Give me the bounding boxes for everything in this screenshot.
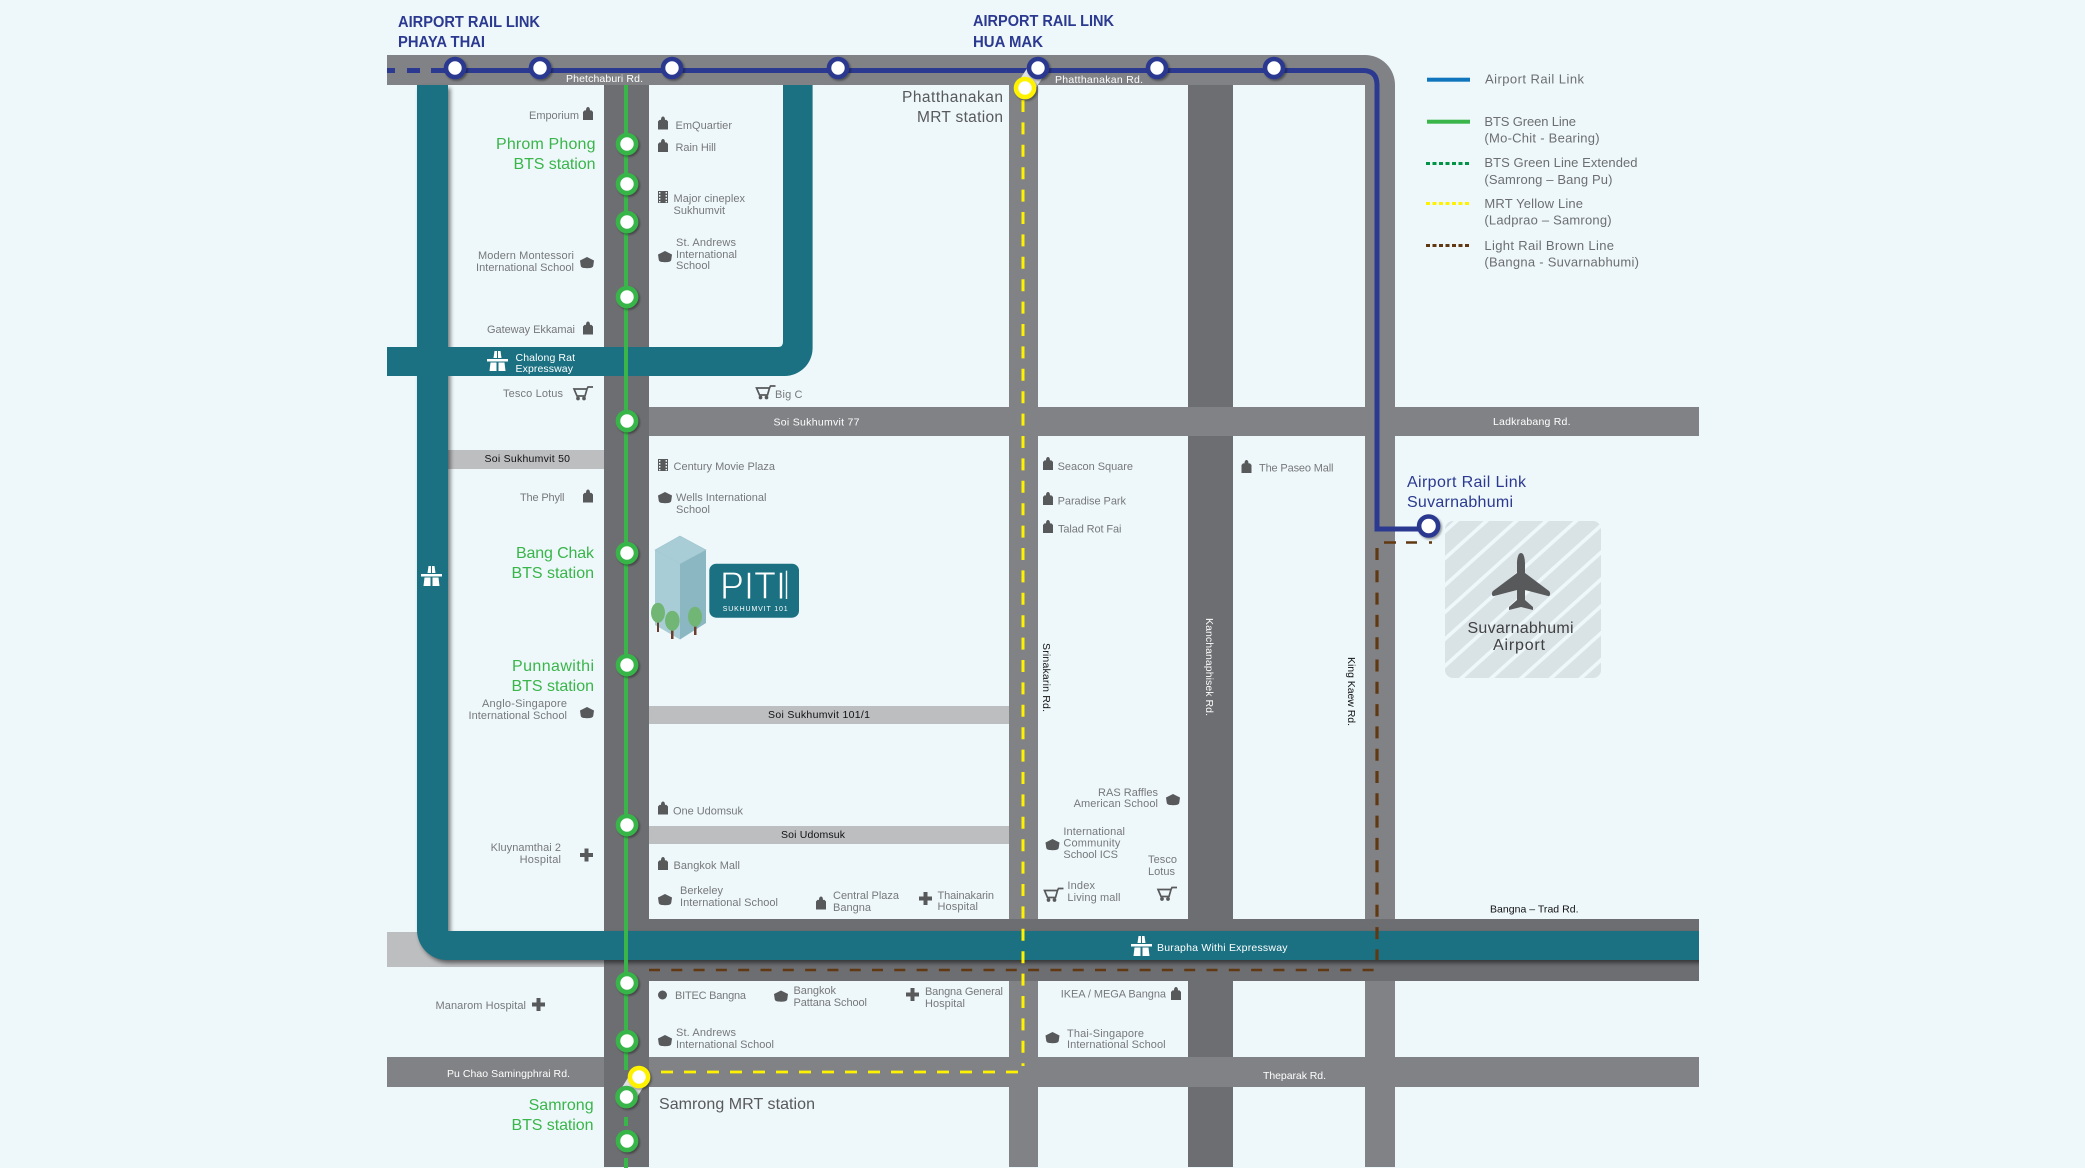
poi: Anglo-Singapore	[468, 698, 594, 722]
legend: BTS Green Line Extended: BTS Green Line Extended	[1484, 155, 1638, 170]
road label: Soi Sukhumvit 50: Soi Sukhumvit 50	[484, 453, 570, 465]
poi: Big C	[756, 386, 803, 401]
heading: Airport Rail Link Phaya Thai: PHAYA THAI	[398, 34, 485, 51]
station: airport link 4	[829, 59, 847, 77]
road: Soi Sukhumvit 101/1	[649, 706, 1009, 724]
poi: BITEC Bangna: BITEC Bangna	[675, 990, 747, 1002]
poi: Emporium	[529, 107, 593, 122]
label: Samrong BTS: BTS station	[512, 1117, 594, 1134]
legend: Airport Rail Link	[1427, 72, 1584, 86]
light rail brown line	[649, 542, 1432, 970]
label: Phatthanakan MRT station: MRT station	[917, 109, 1003, 126]
poi: Major cineplex: Major cineplex	[674, 193, 746, 205]
road label: Soi Sukhumvit 77: Soi Sukhumvit 77	[774, 416, 860, 428]
road: Bangna-Trad east	[604, 919, 1699, 981]
poi: Major cineplex	[658, 191, 746, 217]
road: Phetchaburi, Phatthanakan and King Kaew	[387, 55, 1395, 1167]
legend: BTS Green Line	[1427, 114, 1600, 146]
poi: Berkeley International School	[658, 885, 778, 909]
PITI Sukhumvit 101 logo badge: PITI	[720, 565, 786, 608]
poi: EmQuartier: EmQuartier	[676, 120, 732, 132]
poi: Bangkok Pattana School	[774, 985, 867, 1009]
expressway shadow	[420, 88, 1722, 963]
poi: Big C: Big C	[775, 389, 803, 401]
poi: Index Living mall	[1044, 880, 1120, 904]
airport hatched area	[1445, 521, 1601, 678]
poi: RAS Raffles American School: American School	[1074, 798, 1158, 810]
label: Samrong BTS: Samrong	[529, 1097, 594, 1114]
road: Soi Udomsuk	[649, 826, 1009, 844]
poi: Modern Montessori	[476, 250, 594, 274]
heading: Airport Rail Link Suvarnabhumi: Suvarnabhumi	[1407, 494, 1513, 511]
label: Punnawithi BTS: BTS station	[512, 678, 594, 695]
PITI Sukhumvit 101 logo badge	[709, 564, 799, 618]
station: Phatthanakan MRT	[1016, 79, 1034, 97]
station: Phrom Phong	[618, 135, 636, 153]
poi: International Community School: International	[1063, 826, 1125, 838]
poi: Modern Montessori: Modern Montessori	[478, 250, 574, 262]
label: Phrom Phong BTS: Phrom Phong	[496, 136, 596, 153]
heading: Airport Rail Link Hua Mak: HUA MAK	[973, 34, 1043, 51]
expressway label: Chalong Rat	[487, 351, 575, 375]
poi: Seacon Square	[1043, 457, 1133, 473]
poi: Thainakarin Hospital	[919, 890, 994, 913]
poi: Emporium: Emporium	[529, 110, 579, 122]
building left face	[655, 550, 680, 640]
expressway label: Chalong Rat: Expressway	[516, 363, 574, 375]
poi: Thai-Singapore International School: Thai-Singapore	[1067, 1028, 1144, 1040]
legend: MRT Yellow Line: (Ladprao – Samrong)	[1484, 212, 1612, 228]
poi: Central Plaza Bangna	[816, 890, 900, 914]
poi: Gateway Ekkamai	[487, 322, 593, 336]
poi: Anglo-Singapore: Anglo-Singapore	[482, 698, 567, 710]
expressway: Burapha Withi	[417, 85, 1699, 960]
poi: Rain Hill: Rain Hill	[676, 142, 716, 154]
poi: Tesco Lotus	[503, 387, 593, 400]
poi: EmQuartier	[658, 116, 732, 132]
station: Bearing	[618, 1032, 636, 1050]
station: airport link 7	[1265, 59, 1283, 77]
Airport Rail Link stations	[446, 59, 1438, 536]
label: Samrong BTS	[512, 1097, 594, 1134]
station: Samrong MRT	[630, 1068, 648, 1086]
road label: King Kaew Rd.: King Kaew Rd.	[1345, 657, 1357, 726]
station: airport link 3	[663, 59, 681, 77]
road: Soi Sukhumvit 77 and Ladkrabang	[649, 407, 1699, 436]
label: Phrom Phong BTS	[496, 136, 596, 173]
station: BTS 2	[618, 175, 636, 193]
poi: Tesco Lotus Srinakarin	[1148, 854, 1177, 900]
MRT yellow line	[650, 100, 1023, 1072]
label: Bang Chak BTS: Bang Chak	[516, 545, 595, 562]
label: Bang Chak BTS: BTS station	[512, 565, 594, 582]
poi: Kluynamthai 2 Hospital	[491, 842, 593, 866]
legend: BTS Green Line Extended	[1426, 155, 1638, 187]
poi: RAS Raffles American School: RAS Raffles	[1098, 787, 1158, 799]
poi: Talad Rot Fai	[1043, 520, 1121, 536]
road label: Phetchaburi Rd.: Phetchaburi Rd.	[566, 73, 643, 85]
poi: Seacon Square: Seacon Square	[1058, 461, 1133, 473]
poi: Bangna General Hospital: Hospital	[925, 998, 965, 1010]
poi: Wells International School: School	[676, 504, 710, 516]
airport label: Suvarnabhumi	[1468, 620, 1574, 637]
poi: Central Plaza Bangna: Central Plaza	[833, 890, 900, 902]
station: Bang Chak	[618, 544, 636, 562]
poi: St. Andrews school: International	[676, 249, 737, 261]
heading: Airport Rail Link Hua Mak	[973, 13, 1114, 51]
road: Kanchanaphisek	[1188, 85, 1233, 1167]
poi: St. Andrews school: School	[676, 260, 710, 272]
poi: International Community School	[1046, 826, 1125, 861]
station: Hua Mak	[1029, 59, 1047, 77]
heading: Airport Rail Link Phaya Thai: AIRPORT RAIL LINK	[398, 14, 540, 31]
legend: Airport Rail Link: Airport Rail Link	[1485, 72, 1584, 86]
poi: Major cineplex: Sukhumvit	[674, 205, 725, 217]
poi: Index Living mall: Living mall	[1067, 892, 1120, 904]
road label: Ladkrabang Rd.: Ladkrabang Rd.	[1493, 416, 1570, 428]
PITI Sukhumvit 101 logo badge: SUKHUMVIT 101	[723, 606, 788, 613]
label: Samrong MRT station: Samrong MRT station	[659, 1096, 815, 1113]
road label: Bangna-Trad Rd.: Bangna – Trad Rd.	[1490, 904, 1578, 916]
poi: Rain Hill	[658, 139, 716, 154]
Airport Rail Link line	[387, 70, 1428, 529]
road label: Soi Sukhumvit 101/1: Soi Sukhumvit 101/1	[768, 709, 870, 721]
BTS stations	[618, 135, 636, 1150]
tree 1	[651, 603, 665, 632]
poi: Talad Rot Fai: Talad Rot Fai	[1058, 524, 1121, 536]
station: BTS 3	[618, 213, 636, 231]
airport label	[1468, 620, 1574, 654]
Suvarnabhumi Airport panel	[1445, 521, 1601, 678]
station: Phaya Thai	[446, 59, 464, 77]
poi: The Paseo Mall: The Paseo Mall	[1259, 462, 1334, 474]
icon: airplane	[1492, 553, 1550, 610]
poi: The Phyll: The Phyll	[520, 492, 564, 504]
poi: The Phyll	[520, 490, 593, 504]
road: Pu Chao Samingphrai and Theparak	[387, 1057, 1699, 1087]
poi: Wells International School: Wells International	[676, 492, 766, 504]
heading: Airport Rail Link Hua Mak: AIRPORT RAIL LINK	[973, 13, 1114, 30]
legend: MRT Yellow Line	[1426, 196, 1612, 228]
poi: Bangkok Mall: Bangkok Mall	[674, 860, 740, 872]
road label: Kanchanaphisek Rd.: Kanchanaphisek Rd.	[1203, 618, 1215, 716]
road label: Srinakarin Rd.: Srinakarin Rd.	[1040, 643, 1052, 712]
poi: Bangna General Hospital: Bangna General	[925, 986, 1003, 998]
station: BTS 4	[618, 288, 636, 306]
station: BTS 5	[618, 412, 636, 430]
heading: Airport Rail Link Suvarnabhumi	[1407, 474, 1527, 511]
poi: Index Living mall: Index	[1067, 880, 1096, 892]
heading: Airport Rail Link Suvarnabhumi: Airport Rail Link	[1407, 474, 1527, 491]
road names	[447, 73, 1578, 1082]
poi: Tesco Lotus Srinakarin: Tesco	[1148, 854, 1177, 866]
poi: Bangna General Hospital	[906, 986, 1003, 1010]
poi: Bangkok Pattana School: Bangkok	[794, 985, 836, 997]
building right face	[680, 550, 706, 640]
label: Phrom Phong BTS: BTS station	[514, 156, 596, 173]
poi: RAS Raffles American School	[1074, 787, 1180, 810]
poi: International Community School: School ICS	[1063, 849, 1118, 861]
poi: IKEA / MEGA Bangna: IKEA / MEGA Bangna	[1061, 988, 1167, 1000]
BTS green line	[624, 85, 628, 1168]
poi: Anglo-Singapore: International School	[468, 710, 567, 722]
tree 3	[688, 607, 702, 635]
poi: One Udomsuk: One Udomsuk	[673, 806, 744, 818]
road label: Pu Chao Samingphrai Rd.: Pu Chao Samingphrai Rd.	[447, 1068, 570, 1080]
poi: Gateway Ekkamai: Gateway Ekkamai	[487, 324, 575, 336]
poi: Berkeley International School: Berkeley	[680, 885, 724, 897]
poi: The Paseo Mall	[1242, 460, 1334, 474]
MRT stations	[630, 79, 1034, 1086]
poi: International Community School: Community	[1063, 838, 1121, 850]
heading: Airport Rail Link Phaya Thai	[398, 14, 540, 51]
road: Srinakarin	[1009, 85, 1038, 1167]
expressway label: Chalong Rat: Chalong Rat	[516, 352, 575, 364]
poi: Paradise Park	[1043, 492, 1126, 508]
expressway label: Burapha Withi	[1131, 936, 1288, 956]
poi: Century Movie Plaza: Century Movie Plaza	[674, 461, 776, 473]
legend: BTS Green Line: (Mo-Chit - Bearing)	[1484, 130, 1600, 146]
road: Bangna-Trad west	[387, 932, 604, 967]
label: Bang Chak BTS	[512, 545, 595, 582]
poi: St. Andrews International School: International School	[676, 1039, 774, 1051]
legend: BTS Green Line: BTS Green Line	[1484, 114, 1576, 129]
station: airport link 6	[1148, 59, 1166, 77]
poi: Thainakarin Hospital: Thainakarin	[938, 890, 994, 902]
station: airport link 2	[531, 59, 549, 77]
road label: Theparak Rd.: Theparak Rd.	[1263, 1070, 1326, 1082]
legend: Light Rail Brown Line: (Bangna - Suvarnabhumi)	[1484, 254, 1639, 270]
places of interest	[436, 107, 1334, 1051]
poi: St. Andrews International School	[658, 1027, 774, 1051]
label: Phatthanakan MRT station	[902, 89, 1003, 126]
airport label: Airport	[1493, 637, 1546, 654]
station: extension	[618, 1132, 636, 1150]
poi: Bangkok Pattana School: Pattana School	[794, 997, 867, 1009]
poi: Thainakarin Hospital: Hospital	[938, 901, 978, 913]
road network	[387, 55, 1699, 1167]
poi: Kluynamthai 2 Hospital: Kluynamthai 2	[491, 842, 561, 854]
poi: Thai-Singapore International School: International School	[1067, 1039, 1166, 1051]
station: Bang Na	[618, 974, 636, 992]
tree 2	[665, 611, 680, 639]
poi: Wells International School	[658, 492, 766, 516]
building top	[655, 536, 706, 564]
label: Punnawithi BTS	[512, 658, 594, 695]
legend: Light Rail Brown Line	[1426, 238, 1639, 270]
poi: One Udomsuk	[658, 802, 744, 818]
label: Punnawithi BTS: Punnawithi	[512, 658, 594, 675]
station: Samrong	[618, 1088, 636, 1106]
expressway label: Burapha Withi: Burapha Withi Expressway	[1157, 942, 1288, 954]
poi: Central Plaza Bangna: Bangna	[833, 902, 872, 914]
road label: Soi Udomsuk: Soi Udomsuk	[781, 829, 846, 841]
poi: Kluynamthai 2 Hospital: Hospital	[520, 854, 561, 866]
station interchange connectors	[619, 63, 1046, 1102]
road label: Phatthanakan Rd.: Phatthanakan Rd.	[1055, 74, 1143, 86]
station: Suvarnabhumi	[1419, 516, 1438, 536]
legend	[1426, 72, 1639, 270]
poi: Modern Montessori: International School	[476, 262, 574, 274]
poi: St. Andrews school: St. Andrews	[676, 237, 736, 249]
poi: Paradise Park: Paradise Park	[1058, 496, 1126, 508]
legend: BTS Green Line Extended: (Samrong – Bang Pu)	[1484, 172, 1612, 187]
poi: Berkeley International School: International School	[680, 897, 778, 909]
legend: MRT Yellow Line: MRT Yellow Line	[1484, 196, 1583, 211]
station: Punnawithi	[618, 656, 636, 674]
road: Sukhumvit	[604, 85, 649, 1167]
poi: Thai-Singapore International School	[1046, 1028, 1166, 1051]
station: Udomsuk	[618, 816, 636, 834]
expressway: Chalong Rat	[387, 85, 813, 376]
expressway icon: vertical	[421, 566, 442, 586]
poi: Bangkok Mall	[658, 857, 740, 872]
poi: Manarom Hospital: Manarom Hospital	[436, 1000, 526, 1012]
label: Phatthanakan MRT station: Phatthanakan	[902, 89, 1003, 106]
poi: Tesco Lotus Srinakarin: Lotus	[1148, 866, 1176, 878]
project building illustration	[651, 536, 706, 640]
poi: St. Andrews International School: St. Andrews	[676, 1027, 736, 1039]
poi: Tesco Lotus: Tesco Lotus	[503, 388, 564, 400]
road: Soi Sukhumvit 50	[448, 450, 604, 469]
legend: Light Rail Brown Line: Light Rail Brown Line	[1484, 238, 1614, 253]
poi: St. Andrews school	[658, 237, 737, 272]
